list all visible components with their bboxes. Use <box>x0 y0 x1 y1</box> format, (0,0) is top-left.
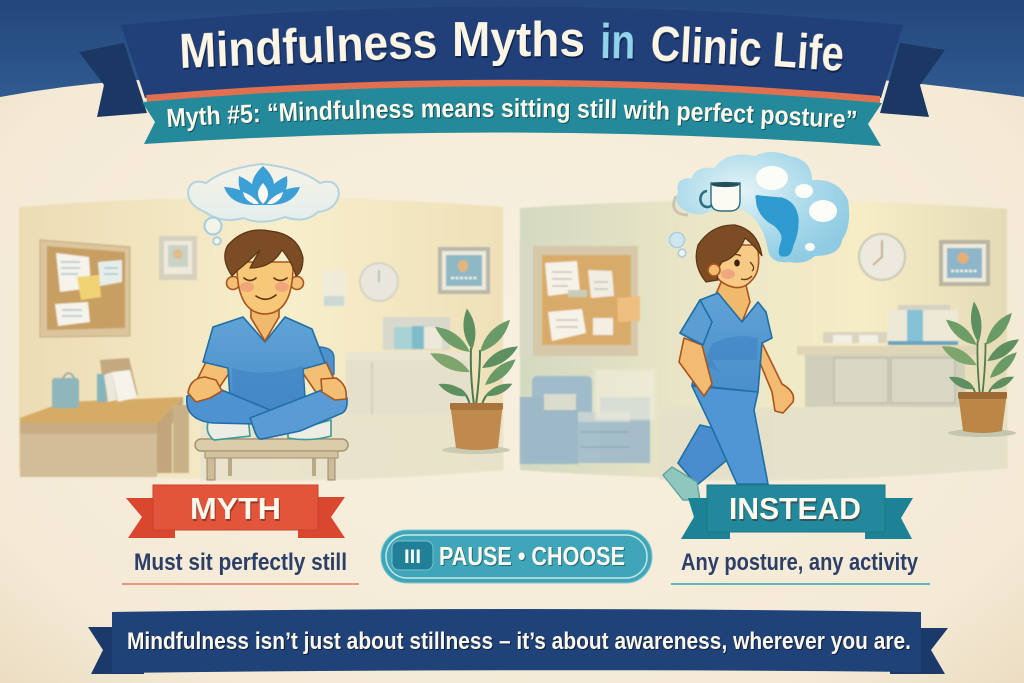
icon: footprint <box>757 196 797 255</box>
left desk <box>20 397 189 477</box>
instead label: Any posture, any activity <box>681 549 919 576</box>
top navy sky band <box>0 0 1024 97</box>
person meditating <box>187 230 347 440</box>
cheek <box>721 269 735 279</box>
arms <box>192 362 340 398</box>
pause choose pill <box>381 530 652 583</box>
shirt <box>680 293 772 392</box>
pot right <box>948 392 1016 437</box>
title: Clinic <box>649 17 763 77</box>
shirt shadow <box>703 336 758 372</box>
pause choose pill: PAUSE • CHOOSE <box>439 541 625 571</box>
closed eyes and smile <box>244 278 287 299</box>
right room wall <box>520 200 1007 479</box>
shirt shadow <box>232 366 305 410</box>
back counter left <box>346 317 471 415</box>
instead ribbon <box>681 485 913 539</box>
cheeks <box>240 282 289 292</box>
shoe right <box>288 420 331 440</box>
wall picture right <box>438 247 490 294</box>
shirt <box>203 317 325 412</box>
title banner <box>121 6 903 98</box>
person walking <box>663 152 849 500</box>
armchair <box>520 376 650 464</box>
ear <box>708 264 720 276</box>
orange stripe <box>146 80 880 103</box>
ears <box>226 276 304 290</box>
icon: lotus <box>224 166 300 205</box>
right room floor <box>660 407 1007 481</box>
hair <box>225 230 303 276</box>
panel: instead clinic scene <box>520 152 1022 500</box>
faded radiator <box>595 370 655 420</box>
myth ribbon: MYTH <box>190 491 281 526</box>
subtitle: Myth #5: “Mindfulness means sitting still with perfect posture” <box>168 98 857 132</box>
shoe <box>663 467 700 500</box>
title: Mindfulness <box>178 14 438 79</box>
title: in <box>600 15 636 70</box>
front leg <box>692 386 768 484</box>
bottom banner <box>88 609 948 674</box>
instead ribbon: INSTEAD <box>729 491 861 526</box>
leg left <box>187 388 270 424</box>
wall picture <box>939 240 990 286</box>
wall picture small <box>159 236 197 280</box>
title banner tails <box>79 43 945 117</box>
pot left <box>442 403 510 454</box>
back leg <box>678 425 727 485</box>
thought cloud: lotus <box>188 164 339 245</box>
leg right <box>250 390 347 439</box>
takeaway message: Mindfulness isn’t just about stillness – it’s about awareness, wherever you are. <box>127 628 911 655</box>
title: Myths <box>452 13 585 67</box>
icon: pause box: III <box>404 547 421 568</box>
eye nose smile <box>731 254 754 280</box>
plant left <box>428 308 521 454</box>
panel: myth clinic scene <box>19 164 521 481</box>
neck <box>251 305 279 341</box>
icon: pause box <box>392 541 433 570</box>
title: Life <box>771 23 846 82</box>
wall clock right <box>859 234 905 280</box>
white cloud puffs <box>756 166 837 251</box>
myth ribbon <box>126 485 345 538</box>
left arm <box>679 338 712 396</box>
face <box>237 262 293 314</box>
wall clock left <box>360 263 398 301</box>
wall note faded <box>322 270 346 307</box>
hair <box>696 225 762 282</box>
title <box>178 13 846 82</box>
thought cloud: coffee and footprint <box>670 152 849 263</box>
left room wall <box>19 198 503 479</box>
corkboard right <box>520 240 640 356</box>
left room floor <box>200 415 503 481</box>
neck <box>716 280 750 322</box>
counter and cabinets <box>797 305 977 407</box>
shirt sleeve left <box>680 300 712 345</box>
hands <box>188 377 346 402</box>
cushion behind <box>320 347 334 384</box>
myth label: Must sit perfectly still <box>134 549 347 576</box>
plant right <box>939 301 1022 437</box>
books and papers <box>97 358 138 402</box>
mug on desk <box>52 373 79 408</box>
icon: coffee cup <box>700 182 740 211</box>
bench <box>195 439 348 480</box>
shoe left <box>207 416 250 440</box>
right arm <box>758 343 794 413</box>
subtitle ribbon <box>142 86 882 146</box>
corkboard left <box>40 240 130 337</box>
face <box>712 245 759 288</box>
